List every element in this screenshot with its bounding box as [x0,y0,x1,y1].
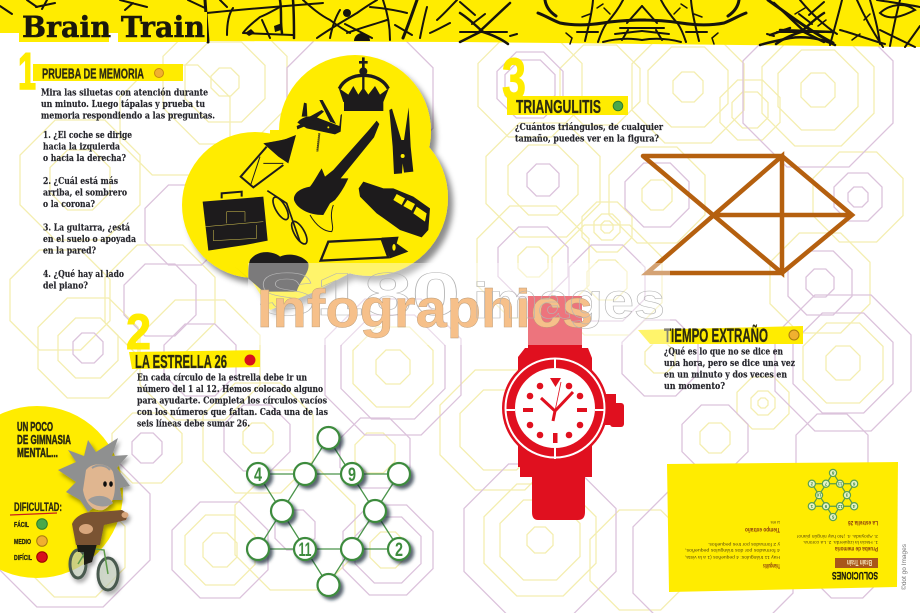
questions: arriba, el sombrero [43,188,127,198]
icon: crown [339,57,389,111]
questions: en el suelo o apoyada [43,234,136,245]
solution: triangulitis: 4 formados por dos triángulos pequeños, [685,548,780,553]
triangle figure [643,156,852,273]
mini solved star: 8 [831,470,834,475]
difficulty legend: DIFÍCIL [14,553,33,562]
solution: prueba de memoria: 3. Apoyada. 4. ¡No hay ningún piano! [797,534,878,539]
heading: LA ESTRELLA 26 [135,352,227,372]
mini solved star: 7 [824,481,827,486]
mini solved star: 10 [816,493,822,498]
difficulty legend: DIFICULTAD: [14,500,62,514]
intro text: Mira las siluetas con atención durante [41,88,208,98]
mini solved star [808,469,858,521]
questions: en la pared? [43,246,96,256]
panel: difficulty legend with character [0,406,130,590]
icon: red wristwatch [502,296,624,520]
heading: un poco de gimnasia mental: MENTAL... [17,445,58,460]
questions: 3. La guitarra, ¿está [43,222,130,234]
icon: electric guitar [294,121,379,232]
mini solved star: 12 [837,504,843,509]
intro text [41,88,215,122]
heading: TRIANGULITIS [516,97,601,117]
character on bicycle [58,438,130,590]
mini solved star: 9 [824,504,827,509]
intro text: memoria respondiendo a las preguntas. [41,110,215,122]
icon: clothespin [389,107,413,174]
heading: un poco de gimnasia mental: UN POCO [17,419,53,434]
body text: En cada círculo de la estrella debe ir un [137,372,307,384]
question text [515,122,664,144]
question text: ¿Cuántos triángulos, de cualquier [515,122,664,133]
heading band [638,326,803,344]
panel: la estrella 26 [126,304,410,596]
heading: soluciones: SOLUCIONES [832,569,878,581]
watermark: Infographics [257,279,593,339]
icon: vintage car [359,182,430,237]
solution: tiempo extraño [745,520,780,532]
question text: en un minuto y dos veces en [664,370,787,380]
mini solved star: 2 [810,481,813,486]
difficulty dot: medio [154,68,164,78]
difficulty dot: medio [789,330,799,340]
number 3: 3 [502,47,526,112]
questions: hacia la izquierda [43,142,120,152]
panel: solutions (upside down) [667,462,898,592]
watermark: images [473,273,665,329]
title: Brain Train [22,10,205,44]
yellow circle [0,406,123,578]
icon: briefcase [203,192,268,251]
question text [664,346,795,392]
mini solved star: 3 [845,493,848,498]
mini solved star: 6 [852,481,855,486]
star puzzle: 9 [348,465,356,486]
solution: triangulitis [685,542,780,568]
questions: del piano? [43,280,88,292]
difficulty legend [10,500,62,562]
difficulty dot: difícil [244,354,256,366]
solution: tiempo extraño: Tiempo extraño [745,526,780,532]
solution: triangulitis: Hay 11 triángulos: 4 pequeños (1 a la vista, [685,555,780,560]
difficulty dot: fácil [613,101,623,111]
icon: piano [235,252,309,292]
body text: para ayudarte. Completa los círculos vacíos [137,396,327,406]
yellow cloud of silhouettes [182,55,448,310]
difficulty legend: MEDIO [14,539,31,546]
solution: prueba de memoria: 1. Hacia la izquierda. 2. La corona. [803,540,878,545]
brown label: Brain Train [847,558,872,567]
questions: 2. ¿Cuál está más [43,176,118,187]
number 1: 1 [18,43,36,101]
questions: 4. ¿Qué hay al lado [43,269,124,280]
solution: prueba de memoria [797,534,878,551]
star puzzle: 2 [395,540,403,561]
solution: triangulitis: y 2 formados por tres pequeños. [708,542,780,547]
header band with thorny branches [0,0,920,47]
question text: tamaño, puedes ver en la figura? [515,134,659,144]
body text: con los números que faltan. Cada una de las [137,407,328,418]
question text: un momento? [664,381,725,392]
watermark [248,261,670,345]
solution: prueba de memoria: Prueba de memoria [834,545,878,551]
panel: tiempo extraño [638,325,803,392]
questions: o la corona? [43,199,95,210]
question text: ¿Qué es lo que no se dice en [664,346,783,358]
mini solved star: 11 [837,481,842,486]
heading band [507,96,628,115]
panel: prueba de memoria [18,43,215,292]
cloud shape [182,55,448,310]
solution: la estrella 26: La estrella 26 [847,519,878,525]
star puzzle: 11 [298,540,312,561]
credit: ©dot go Images [901,544,908,590]
solution: triangulitis: Triangulitis [763,562,780,568]
icon: glasses [267,191,310,246]
mini solved star: 1 [810,504,813,509]
icon: lantern [241,135,296,187]
body text [137,372,328,430]
heading: un poco de gimnasia mental: DE GIMNASIA [17,432,71,447]
difficulty legend: FÁCIL [14,520,30,529]
watermark: S180 [258,261,460,328]
mini solved star: 5 [831,515,834,520]
body text: número del 1 al 12. Hemos colocado alguno [137,384,323,395]
number 2: 2 [126,304,151,360]
solution: tiempo extraño: La eme. [770,520,780,525]
questions: o hacia la derecha? [43,153,126,164]
heading: un poco de gimnasia mental [17,419,71,460]
panel: triangulitis [502,47,852,273]
heading: PRUEBA DE MEMORIA [42,66,144,82]
questions [43,130,136,292]
mini solved star: 4 [852,504,855,509]
heading band [33,64,183,81]
question text: una hora, pero se dice una vez [664,358,795,369]
body text: seis líneas debe sumar 26. [137,418,250,430]
icon: pocket knife [297,100,342,152]
questions: 1. ¿El coche se dirige [43,130,132,141]
intro text: un minuto. Luego tápalas y prueba tu [41,99,205,110]
heading band [129,350,260,369]
star puzzle: 4 [254,465,262,486]
star puzzle [247,427,410,596]
icon: saw [321,237,408,261]
heading: TIEMPO EXTRAÑO [664,325,768,347]
